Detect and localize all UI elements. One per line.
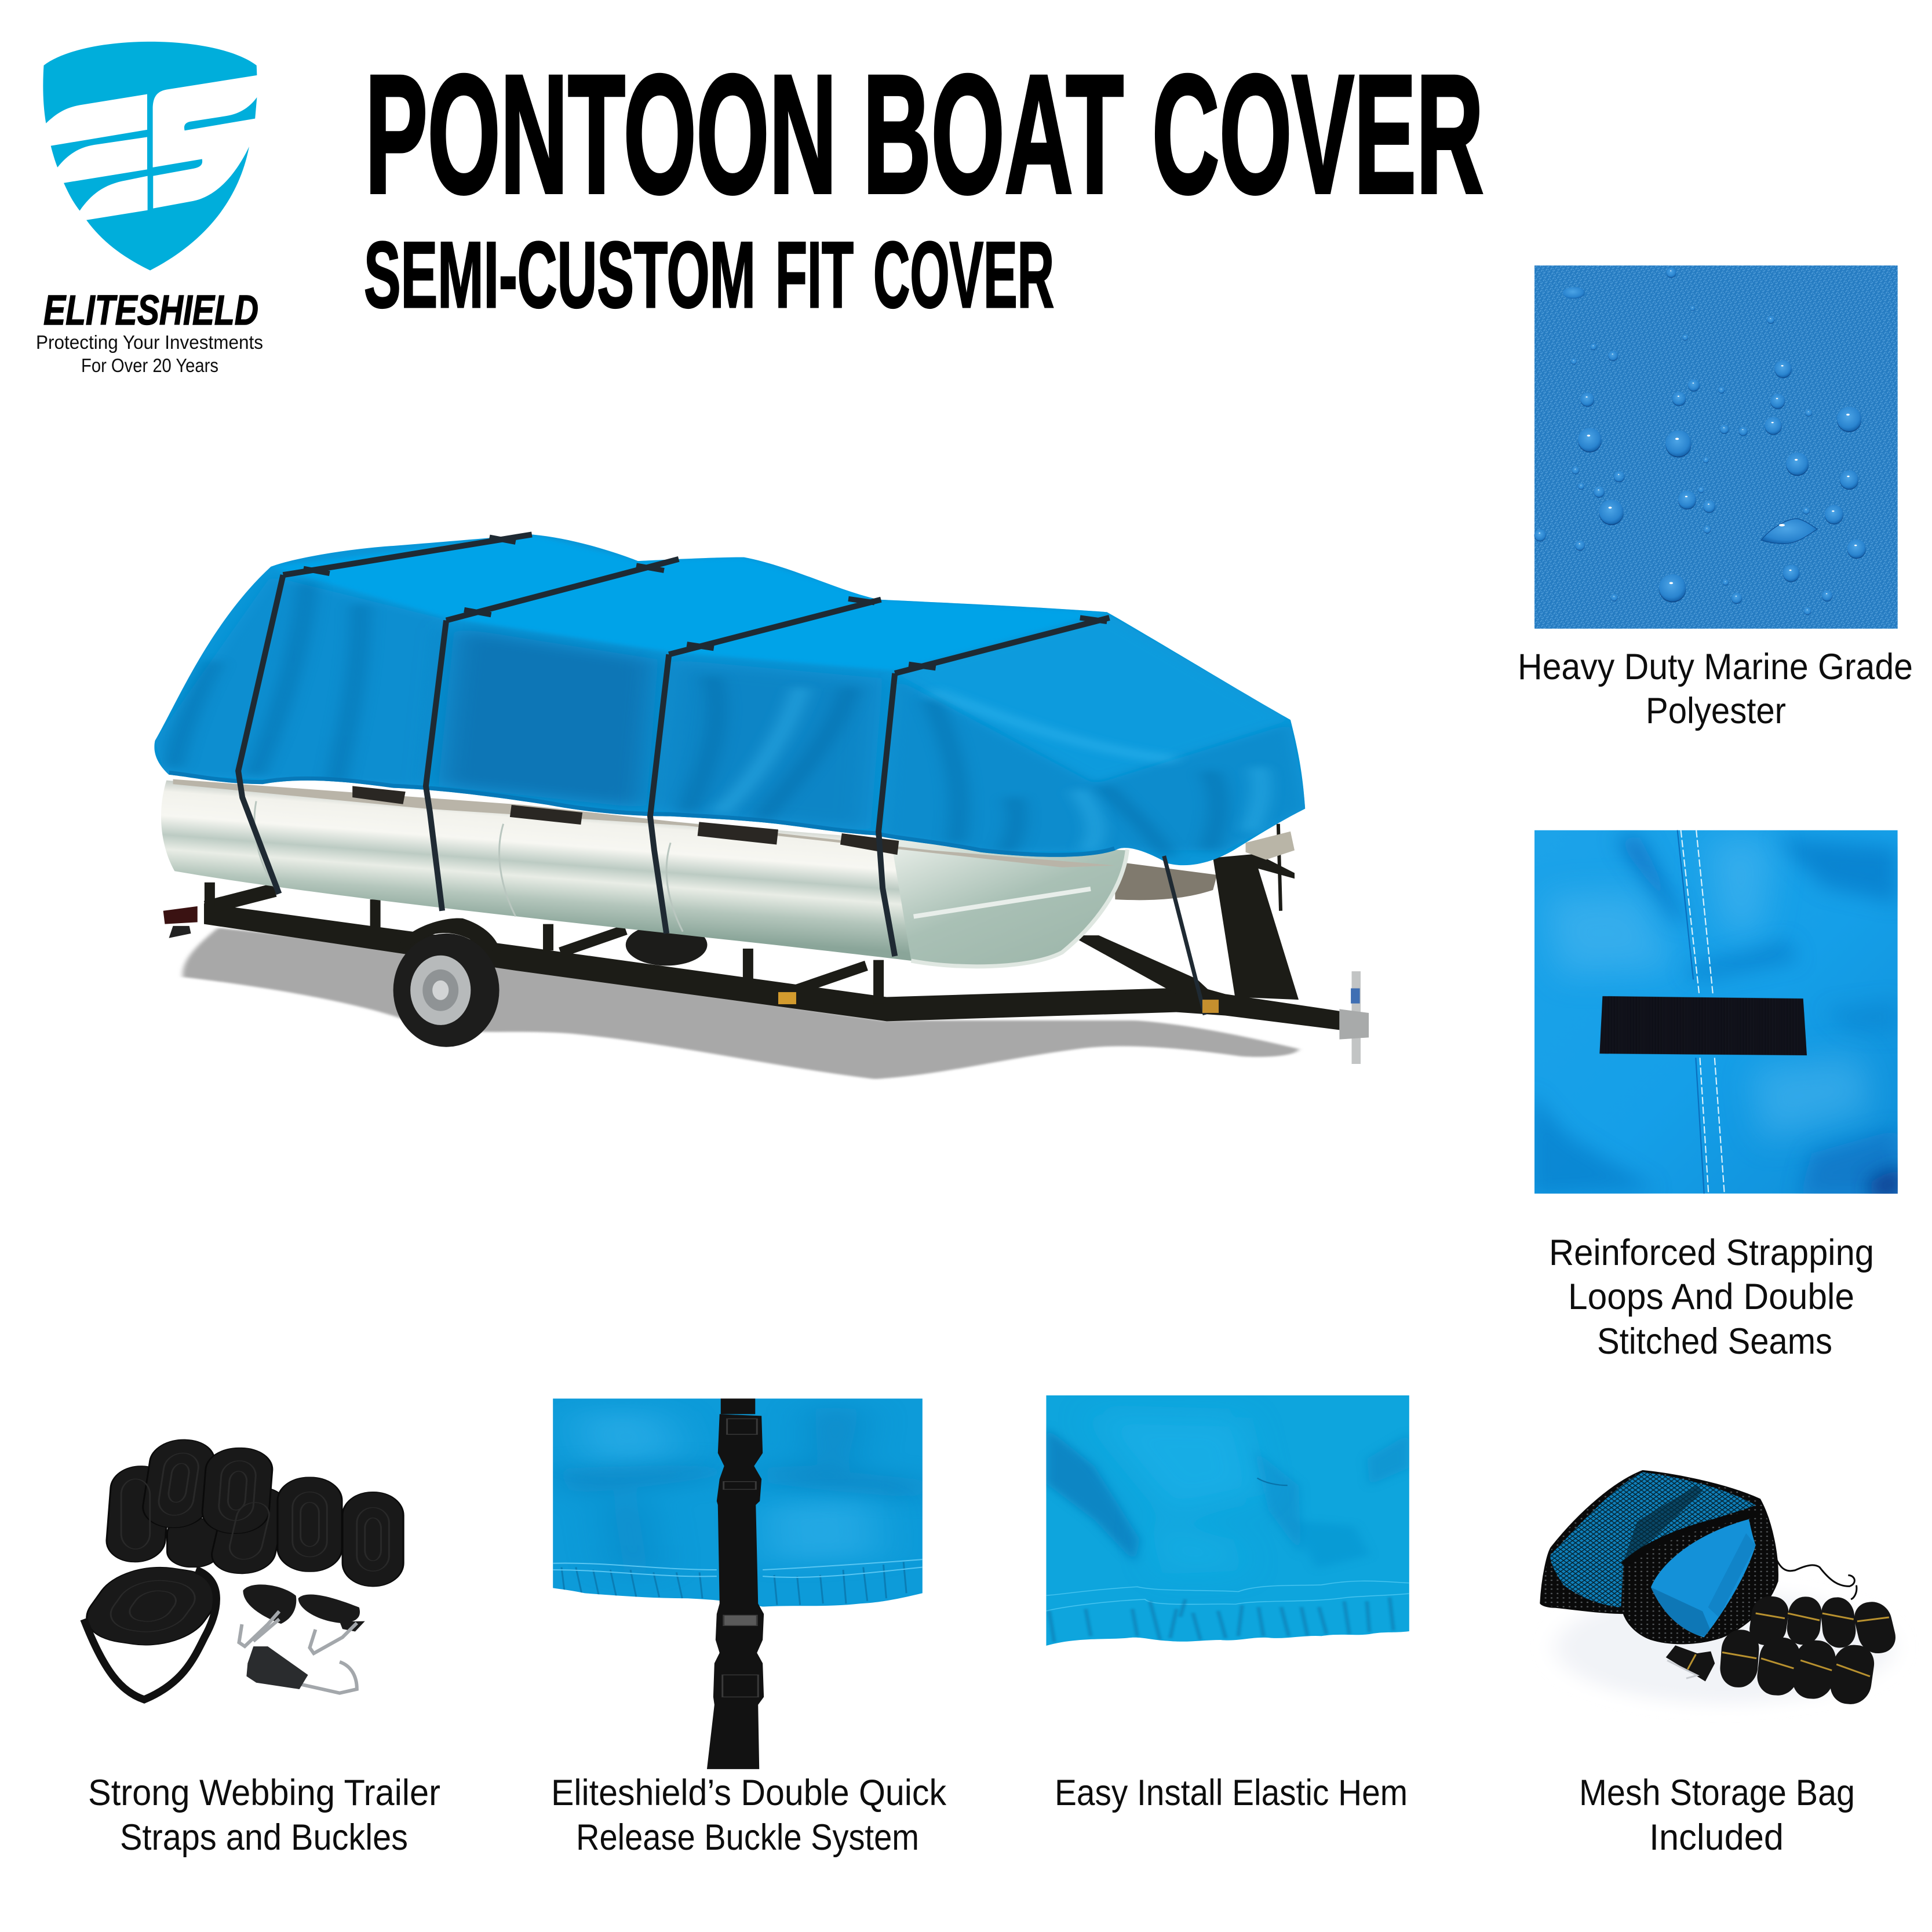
caption [88, 1773, 440, 1858]
main illustration: covered pontoon boat on trailer [116, 510, 1369, 1079]
caption: Easy Install Elastic Hem [1055, 1773, 1408, 1813]
rolled webbing straps [70, 1439, 403, 1652]
mesh bag [1541, 1471, 1778, 1643]
icon: shield [43, 42, 257, 271]
dark fabric folds [173, 582, 1218, 858]
panel: reinforced strapping loop and seams [1530, 830, 1902, 1362]
deck rail [173, 779, 1115, 867]
tagline [36, 331, 263, 376]
far wheel [626, 924, 708, 965]
stitched hem lines [1046, 1581, 1409, 1611]
blue cover [154, 534, 1305, 866]
cover straps [238, 534, 1205, 1015]
tagline: For Over 20 Years [81, 355, 218, 376]
yellow bands and hook [1667, 1613, 1889, 1678]
caption: Included [1649, 1817, 1784, 1858]
tail light and hitch jack [163, 832, 1369, 1064]
caption: Strong Webbing Trailer [88, 1773, 440, 1813]
pontoon hull [161, 781, 932, 961]
ground shadow [183, 928, 1299, 1079]
gathered hem shadow [169, 775, 1115, 857]
metal hooks [239, 1612, 357, 1693]
deck fence panels [352, 786, 899, 855]
caption: Mesh Storage Bag [1579, 1773, 1855, 1813]
small straps [243, 1584, 365, 1632]
caption [1518, 647, 1913, 731]
side panel centre [438, 627, 658, 809]
soft shadow [1556, 1591, 1893, 1704]
side panel left [154, 689, 406, 789]
panel: waterproof fabric swatch with droplets [1518, 265, 1913, 731]
caption: Heavy Duty Marine Grade [1518, 647, 1913, 687]
logo: Eliteshield shield and wordmark [36, 42, 263, 376]
strap clips [304, 537, 1107, 668]
trailer wheel [393, 918, 501, 1047]
elastic gathers [1049, 1598, 1394, 1642]
caption: Loops And Double [1568, 1277, 1854, 1317]
drawstring and bag rim [1624, 1514, 1857, 1599]
hem fabric photo [1046, 1395, 1409, 1646]
panel: double quick release buckle system [551, 1398, 946, 1858]
far pontoon [1115, 862, 1217, 900]
caption: Stitched Seams [1597, 1321, 1832, 1362]
subtitle: SEMI-CUSTOM [364, 223, 756, 327]
caption: Reinforced Strapping [1549, 1233, 1874, 1273]
roof panel [271, 534, 1107, 670]
caption: Polyester [1646, 691, 1786, 731]
buckle photo [553, 1398, 923, 1769]
panel: easy install elastic hem [1046, 1395, 1409, 1813]
ratchet [246, 1646, 308, 1689]
panel: mesh storage bag included [1534, 1457, 1899, 1858]
double stitched seam [1681, 830, 1725, 1194]
panel: webbing trailer straps and buckles [70, 1439, 440, 1858]
trailer frame [204, 824, 1339, 1030]
tagline: Protecting Your Investments [36, 331, 263, 353]
front panel [895, 614, 1291, 782]
elastic gathers [562, 1562, 906, 1605]
blue fabric [553, 1398, 923, 1609]
title: PONTOON [365, 40, 837, 228]
light fabric folds [720, 688, 1261, 850]
side panel right [654, 659, 883, 832]
title: BOAT [863, 40, 1124, 228]
pontoon bow [891, 839, 1127, 967]
subtitle: COVER [873, 223, 1054, 327]
loose strap [84, 1570, 216, 1700]
brand name: ELITESHIELD [43, 287, 258, 334]
title: COVER [1152, 40, 1483, 228]
packed cover inside bag [1643, 1513, 1765, 1641]
caption: Eliteshield’s Double Quick [551, 1773, 946, 1813]
caption [551, 1773, 946, 1858]
water droplets [1534, 268, 1866, 615]
black strap loop [1599, 996, 1807, 1055]
black strap with buckles [707, 1398, 764, 1769]
rolled straps [1666, 1595, 1899, 1705]
bag photo [1534, 1457, 1899, 1705]
caption: Straps and Buckles [120, 1817, 408, 1858]
caption: Release Buckle System [576, 1817, 919, 1858]
subtitle: FIT [775, 223, 854, 327]
caption [1579, 1773, 1855, 1858]
caption [1549, 1233, 1874, 1362]
coil rings [100, 1453, 389, 1636]
strap photo [70, 1439, 403, 1700]
fabric swatch [1534, 265, 1898, 629]
fabric photo [1530, 830, 1902, 1197]
